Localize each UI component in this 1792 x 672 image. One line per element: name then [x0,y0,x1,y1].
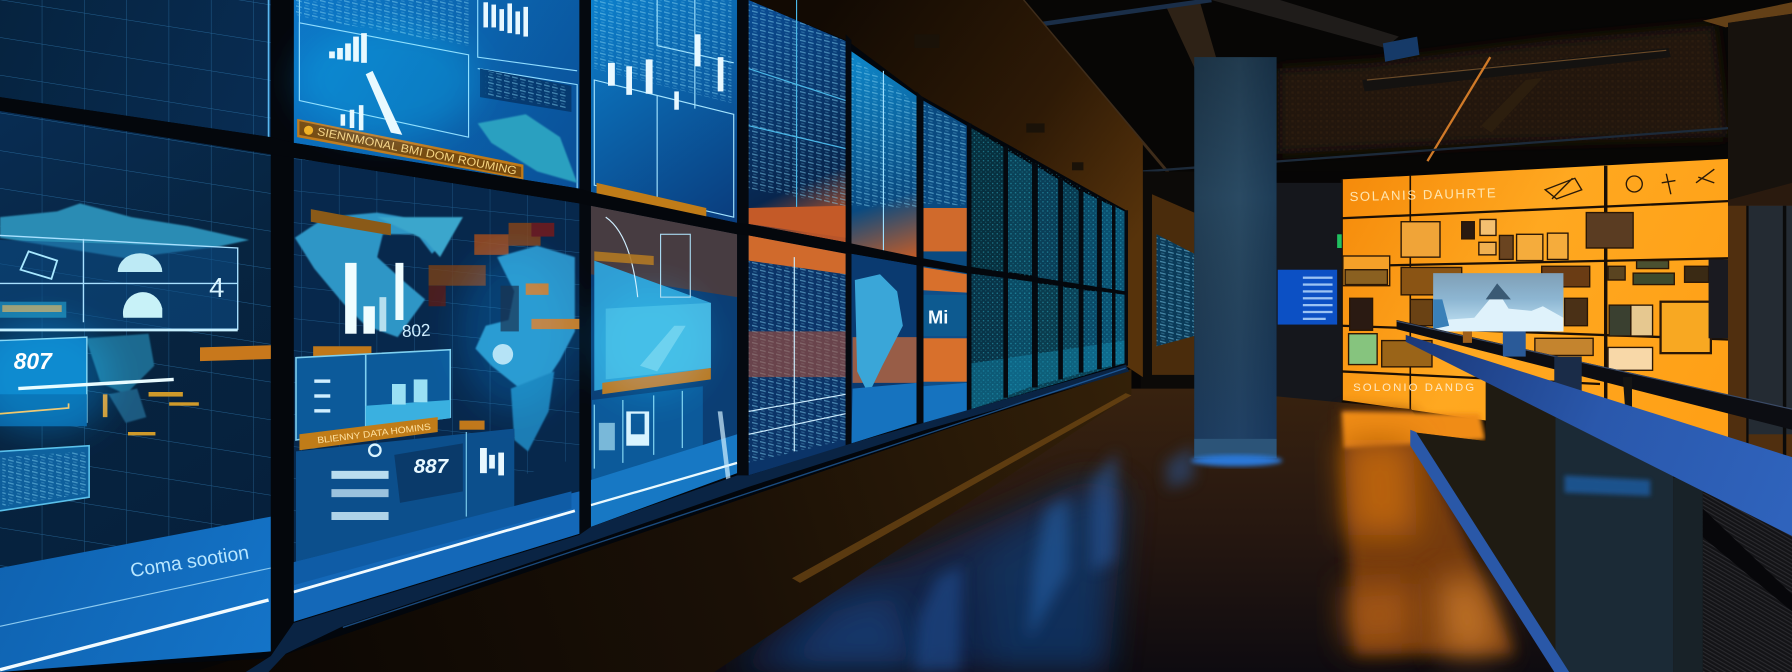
panel: lower fifth screen [851,254,917,443]
map markers [103,392,199,435]
panel: lower second screen [294,158,579,622]
panel: lower far-left screen [0,111,274,672]
upper map [478,114,577,183]
mini bar chart [329,2,528,135]
orange tile blocks [429,223,554,306]
map: far-left continent [0,203,249,423]
panel: upper fourth screen [749,0,846,242]
concrete pillar [1191,57,1282,466]
small bar table [0,446,89,511]
bar chart on map [345,263,403,334]
panel: lower fourth screen [749,235,846,475]
orange title banner [297,119,523,179]
world map: americas [295,213,463,337]
balcony handrail [1397,320,1792,430]
wall frame lines [1342,166,1728,446]
floor [194,389,1566,672]
orange tags [311,209,579,430]
number label: 802 [401,320,431,341]
wall lights [914,34,1083,170]
blue band [294,491,579,622]
lower mini panels [592,386,703,480]
orange title banner: SIENNMONAL BMI DOM ROUMING [316,126,518,178]
orange tag [200,345,274,361]
lower stat blocks [296,429,514,562]
panel: upper third screen [591,0,737,223]
lower rail [1410,430,1569,672]
screen mullions [0,0,1129,672]
panel: upper far-left screen [0,0,271,137]
lower stat blocks: 887 [414,455,450,478]
ceiling [1023,0,1792,189]
wall band below screens [194,369,1131,672]
wall-mounted display [1433,273,1563,331]
bottom band with caption: Coma sootion [129,542,250,582]
top rail [1406,335,1792,536]
orange caption banner [299,417,438,450]
dark partition with blue screen [1277,183,1342,402]
floor blue reflections [731,480,1126,672]
far screen panels [971,128,1125,409]
screen wall [0,0,1129,672]
wall framed pictures [1343,213,1728,370]
bottom band with caption [0,517,271,672]
orange caption banner: BLIENNY DATA HOMINS [317,422,431,445]
orange exhibit wall [1342,159,1728,455]
number 4: 4 [209,272,224,303]
wall bottom caption: SOLONIO DANDG [1353,382,1476,394]
screen glow overlays [0,23,709,434]
stat tile 807: 807 [14,348,53,374]
display panel with gauges [0,235,238,331]
floor orange reflection [1342,409,1514,654]
world map: africa and south america [475,246,575,451]
left wall above screens [749,0,1143,377]
screen base ledge [246,365,1129,672]
panel: lower third screen [591,206,737,527]
stat tile 807 [0,337,174,426]
orange label [597,183,706,219]
panel: lower sixth screen with M tile: Mi [928,306,948,327]
orange caption [602,368,711,394]
panel: upper second screen [294,0,579,189]
inset chart panel [296,350,450,440]
wall heading: SOLANIS DAUHRTE [1349,185,1497,204]
panel: upper sixth screen [923,101,967,267]
glass balustrade [1411,381,1792,672]
panel: upper fifth screen [851,51,917,262]
side column [1728,14,1792,480]
back wall of corridor [1141,171,1198,389]
blue diagram block [594,261,711,391]
wall icons [1545,169,1714,199]
panel: lower sixth screen with M tile [923,265,967,423]
